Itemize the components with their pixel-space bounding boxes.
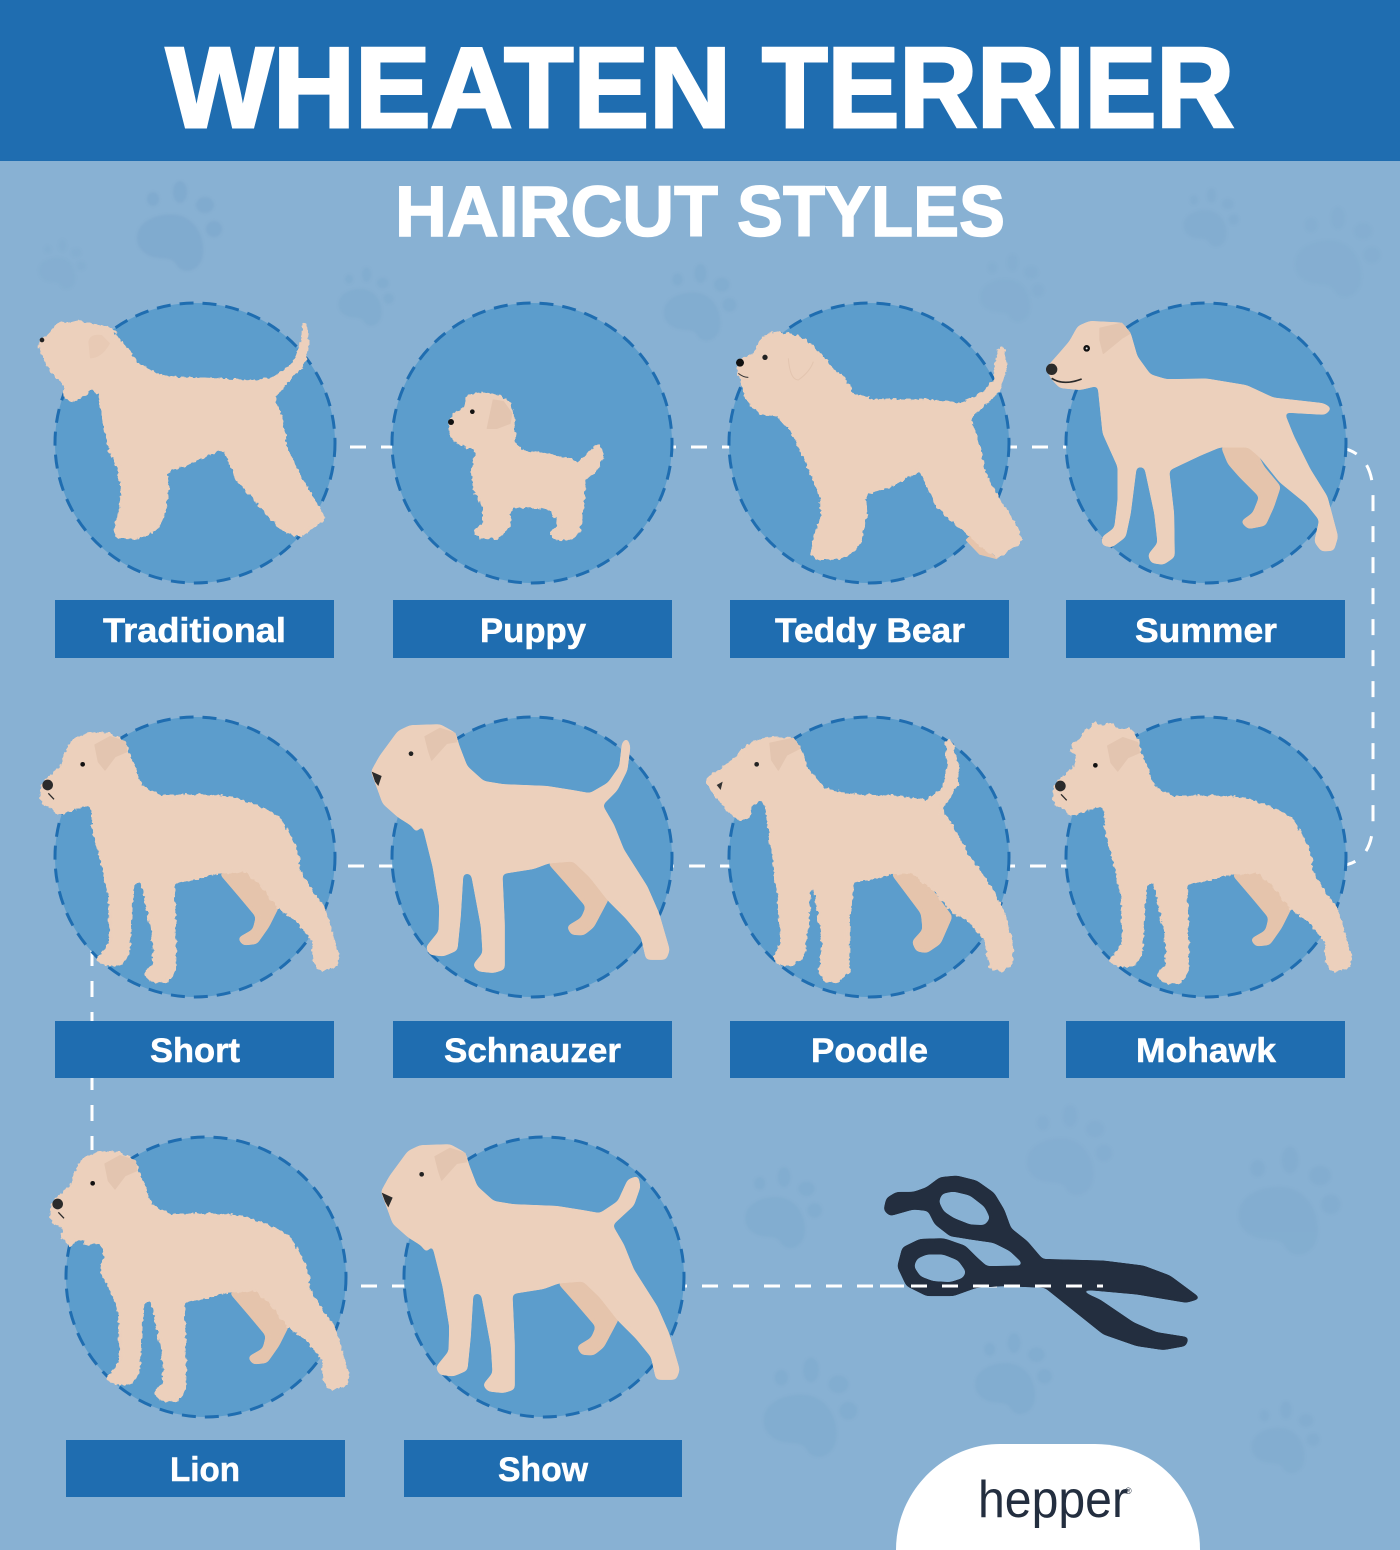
panel: Summer [1046, 303, 1346, 658]
label: Lion [66, 1440, 345, 1497]
label: Short [55, 1021, 334, 1078]
label: Teddy Bear: Teddy Bear [775, 612, 965, 650]
dog: Traditional [40, 322, 325, 538]
panel: Show [382, 1137, 684, 1497]
logo badge: hepper [896, 1444, 1200, 1550]
panel: Teddy Bear [729, 303, 1022, 658]
dog: Schnauzer [372, 725, 669, 972]
dog: Summer [1046, 322, 1337, 564]
dog: Teddy Bear [736, 332, 1022, 560]
panel: Puppy [392, 303, 672, 658]
panel: Schnauzer [372, 717, 672, 1078]
label: Schnauzer: Schnauzer [444, 1032, 621, 1070]
label: Mohawk [1066, 1021, 1345, 1078]
label: Puppy: Puppy [480, 612, 586, 650]
logo badge: hepper: hepper [978, 1471, 1128, 1529]
label: Puppy [393, 600, 672, 658]
label: Traditional: Traditional [103, 612, 286, 650]
label: Show: Show [498, 1451, 589, 1489]
panel: Lion [50, 1137, 349, 1497]
label: Poodle [730, 1021, 1009, 1078]
dashed connector path [92, 447, 1373, 1286]
panel: Short [40, 717, 339, 1078]
dog: Lion [50, 1152, 349, 1401]
label: Teddy Bear [730, 600, 1009, 658]
logo badge: hepper: ® [1125, 1486, 1132, 1496]
subtitle [395, 173, 1005, 252]
icon: scissors [884, 1176, 1200, 1350]
dog: Mohawk [1053, 721, 1352, 983]
dog: Short [40, 733, 339, 982]
decorative paw prints [39, 181, 1380, 1473]
label: Mohawk: Mohawk [1136, 1032, 1276, 1070]
dog: Poodle [706, 737, 1012, 982]
panel: Mohawk [1053, 717, 1352, 1078]
label: Show [404, 1440, 682, 1497]
label: Short: Short [150, 1032, 240, 1070]
label: Schnauzer [393, 1021, 672, 1078]
title banner [0, 0, 1400, 161]
title banner: TERRIER [762, 25, 1234, 152]
subtitle: STYLES [737, 173, 1005, 252]
label: Traditional [55, 600, 334, 658]
label: Summer [1066, 600, 1345, 658]
label: Poodle: Poodle [811, 1032, 928, 1070]
dashed line over scissors [880, 1284, 1103, 1288]
label: Summer: Summer [1135, 612, 1277, 650]
title banner: WHEATEN [166, 25, 731, 152]
subtitle: HAIRCUT [395, 173, 718, 252]
panel: Traditional [40, 303, 335, 658]
dog: Show [382, 1145, 679, 1392]
dog: Puppy [448, 393, 603, 539]
label: Lion: Lion [170, 1451, 240, 1489]
panel: Poodle [706, 717, 1012, 1078]
